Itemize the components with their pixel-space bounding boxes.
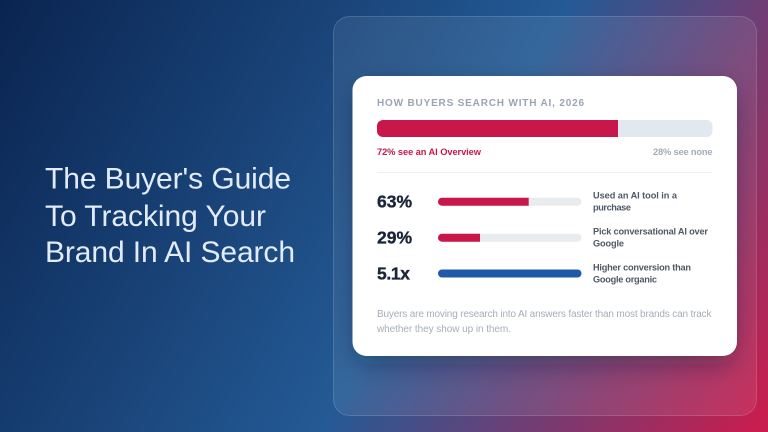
row: 63%: purchase (593, 202, 631, 212)
chart heading: HOW BUYERS SEARCH WITH AI, 2026 (377, 98, 584, 109)
row: 29%: Pick conversational AI over (593, 226, 708, 236)
panel: white stats card (352, 76, 737, 356)
row: 5.1x (377, 262, 691, 284)
card shadow (356, 88, 734, 364)
row: 63%: Used an AI tool in a (593, 190, 678, 200)
stacked bar: 72 / 28 (377, 120, 712, 137)
title: To Tracking Your (45, 200, 266, 233)
bar label: 28%: 28% see none (653, 147, 712, 157)
title: Brand In AI Search (45, 236, 295, 269)
row: 63%: 63% (377, 192, 412, 212)
panel: translucent frame (334, 16, 756, 416)
title (45, 162, 295, 269)
footnote: Buyers are moving research into AI answers faster than most brands can track (377, 309, 712, 320)
row: 63% (377, 190, 678, 212)
row: 5.1x: Google organic (593, 274, 657, 284)
footnote: whether they show up in them. (376, 324, 511, 335)
row: 29% (377, 226, 708, 248)
row: 29%: 29% (377, 228, 412, 248)
title: The Buyer's Guide (45, 162, 291, 196)
row: 5.1x: Higher conversion than (593, 262, 691, 272)
row: 29%: Google (593, 238, 624, 248)
bar label: 72%: 72% see an AI Overview (377, 147, 482, 157)
row: 5.1x: 5.1x (377, 264, 410, 284)
